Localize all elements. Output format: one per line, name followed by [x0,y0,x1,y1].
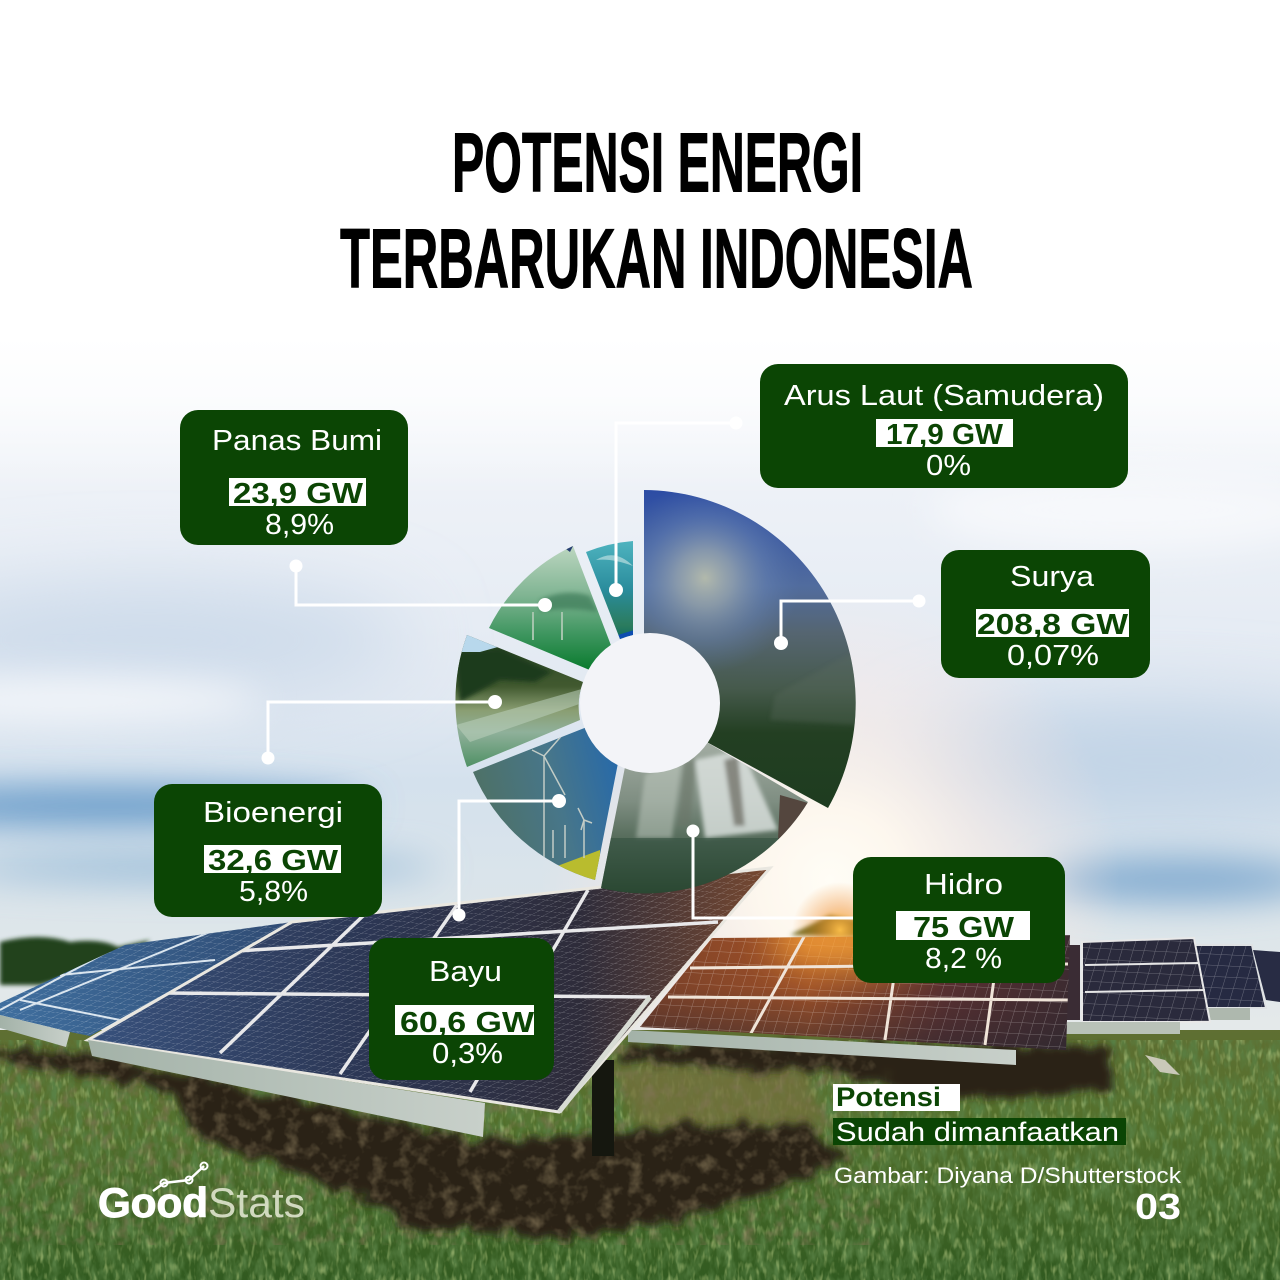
logo: GoodStats [98,1162,305,1226]
callout: Hidro: Hidro [924,869,1003,901]
slice: Panas Bumi [489,546,611,670]
connector: Arus Laut [609,416,742,597]
callout: Bayu: 0,3% [432,1038,503,1070]
callout: Bayu [369,938,554,1080]
connector: Panas Bumi [290,560,552,612]
callout: Bayu: Bayu [429,956,502,988]
callout: Bioenergi [154,784,382,917]
callout: Arus Laut [760,364,1128,488]
slice: Bioenergi [455,635,583,767]
callout: Arus Laut: 0% [926,450,971,482]
slice: Surya [644,490,856,808]
logo: GoodStats: Good [98,1179,208,1226]
callout: Bioenergi: 32,6 GW [208,845,339,877]
connector: Surya [774,594,926,650]
callout: Panas Bumi [180,410,408,545]
logo: GoodStats: Stats [208,1179,305,1226]
callout: Bioenergi: 5,8% [239,876,308,908]
title: POTENSI ENERGI [452,116,863,210]
page number: 03 [1135,1186,1181,1227]
donut hole [580,633,720,773]
background photo: sky and solar field [0,335,1280,1280]
connector: Bayu [452,794,566,922]
connector: Bioenergi [262,695,502,764]
slice: Bayu [473,728,618,880]
callout: Surya [941,550,1150,678]
image credit: Gambar: Diyana D/Shutterstock [834,1163,1182,1188]
callout: Arus Laut: 17,9 GW [886,419,1004,451]
callout: Surya: 0,07% [1007,640,1099,672]
callout: Surya: 208,8 GW [977,609,1129,641]
legend: Potensi: Potensi [836,1082,941,1112]
slice: Hidro [601,742,808,894]
callout: Panas Bumi: 8,9% [265,509,334,541]
callout: Hidro [853,857,1065,983]
legend: Sudah dimanfaatkan: Sudah dimanfaatkan [836,1117,1119,1147]
donut chart [450,483,860,898]
callout: Surya: Surya [1010,561,1095,593]
callout: Panas Bumi: Panas Bumi [212,425,382,457]
callout: Hidro: 75 GW [913,912,1015,944]
callout: Bioenergi: Bioenergi [203,797,343,829]
callout: Panas Bumi: 23,9 GW [233,478,364,510]
connector: Hidro [686,824,860,918]
callout: Arus Laut: Arus Laut (Samudera) [784,380,1104,412]
callout: Hidro: 8,2 % [925,943,1002,975]
slice: Arus Laut [586,541,633,639]
title [340,116,973,306]
callout: Bayu: 60,6 GW [400,1007,535,1039]
